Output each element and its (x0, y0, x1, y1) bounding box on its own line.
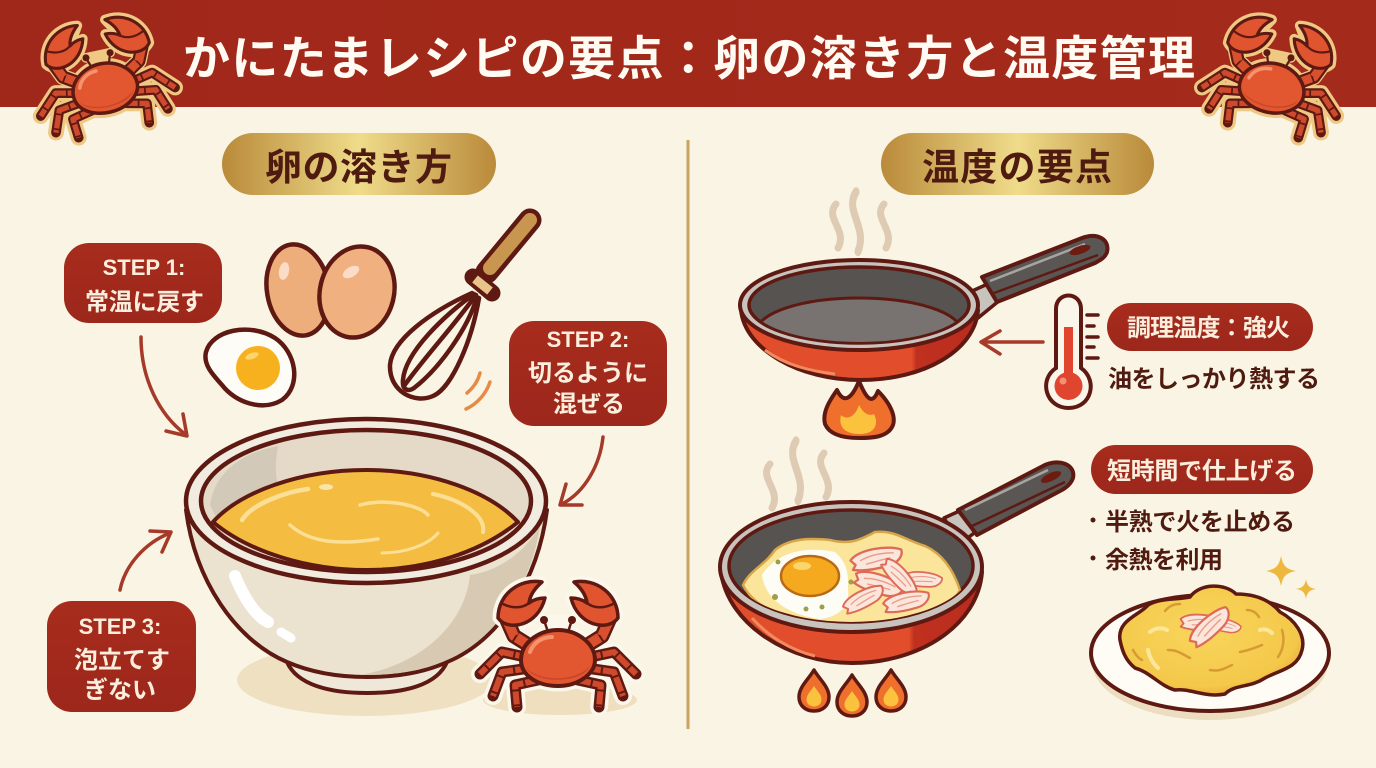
label: cooking temperature: 調理温度：強火 (1127, 315, 1290, 342)
arrow: step 3 to bowl (120, 531, 171, 590)
step 3 bubble: ぎない (84, 676, 156, 704)
heading: egg beating: 卵の溶き方 (265, 147, 452, 188)
step 3 bubble: STEP 3: (79, 614, 161, 639)
icon: sparkles (1266, 556, 1316, 599)
label: cooking temperature (1107, 303, 1313, 351)
title: かにたまレシピの要点：卵の溶き方と温度管理 (183, 32, 1195, 85)
step 2 bubble: STEP 2: (547, 327, 629, 352)
icon: crab beside bowl (480, 581, 636, 707)
heading: temperature: 温度の要点 (922, 147, 1112, 188)
step 1 bubble (64, 243, 222, 323)
icon: pan with egg and crab (720, 462, 1073, 663)
icon: flames under second pan (799, 670, 906, 716)
shadow under bowl (237, 644, 493, 716)
shadow under crab (483, 685, 637, 715)
header band (0, 0, 1376, 107)
icon: crab header left (24, 8, 181, 144)
step 2 bubble: 混ぜる (553, 391, 625, 418)
icon: finished omelet on plate (1091, 586, 1329, 720)
steam above first pan (833, 192, 889, 251)
panel: temperature (720, 133, 1329, 720)
panel: egg beating (47, 133, 667, 716)
list: finishing points: 半熟で火を止める (1105, 509, 1295, 536)
step 3 bubble: 泡立てす (74, 647, 170, 674)
icon: crab header right (1196, 8, 1353, 144)
heading: temperature (881, 133, 1154, 195)
icon: flame under first pan (824, 381, 894, 438)
list: finishing points: 余熱を利用 (1105, 547, 1223, 574)
step 2 bubble (509, 321, 667, 426)
step 1 bubble: 常温に戻す (85, 289, 204, 316)
arrow: step 2 to bowl (560, 437, 603, 505)
list: finishing points (1090, 509, 1295, 574)
step 2 bubble: 切るように (528, 360, 648, 387)
vertical divider line (686, 140, 690, 729)
step 1 bubble: STEP 1: (103, 255, 185, 280)
steam above second pan (767, 441, 829, 508)
label: finish quickly (1091, 445, 1313, 494)
icon: eggs (259, 238, 404, 346)
label: finish quickly: 短時間で仕上げる (1107, 458, 1297, 485)
icon: thermometer (1046, 296, 1098, 408)
icon: mixing bowl with beaten egg (186, 419, 547, 693)
text: heat the oil: 油をしっかり熱する (1108, 366, 1320, 393)
icon: boiled egg (205, 330, 294, 405)
heading: egg beating (222, 133, 496, 195)
step 3 bubble (47, 601, 196, 712)
arrow: thermometer to pan (981, 331, 1043, 354)
icon: hot empty pan (740, 236, 1107, 380)
arrow: step 1 to bowl (141, 337, 187, 436)
icon: whisk (390, 220, 530, 409)
